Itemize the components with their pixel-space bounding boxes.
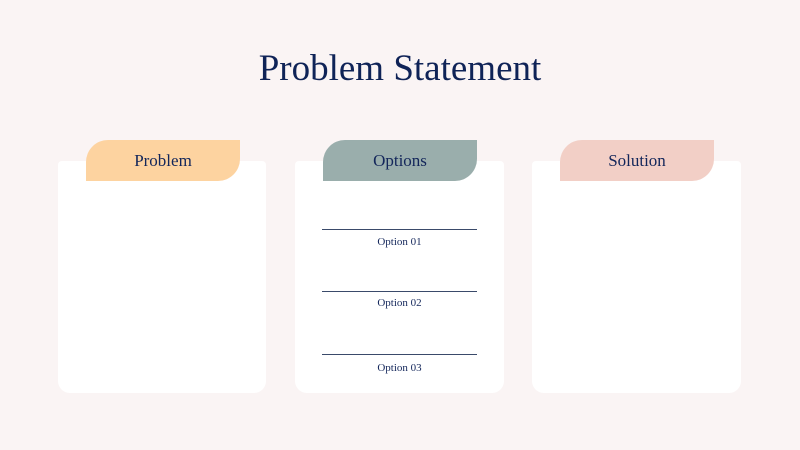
option 02 label: Option 02 — [377, 297, 422, 309]
tab: options — [323, 140, 477, 181]
option 01 label: Option 01 — [377, 236, 422, 248]
panel: options — [295, 161, 504, 393]
tab: solution: Solution — [608, 151, 666, 170]
option 03 line — [322, 354, 477, 355]
tab: problem: Problem — [134, 151, 192, 170]
tab: problem — [86, 140, 240, 181]
option 03 label: Option 03 — [377, 362, 422, 374]
panel: problem — [58, 161, 266, 393]
title: Problem Statement — [259, 48, 541, 89]
option 02 line — [322, 291, 477, 292]
panel: solution — [532, 161, 741, 393]
tab: options: Options — [373, 151, 427, 170]
tab: solution — [560, 140, 714, 181]
option 01 line — [322, 229, 477, 230]
